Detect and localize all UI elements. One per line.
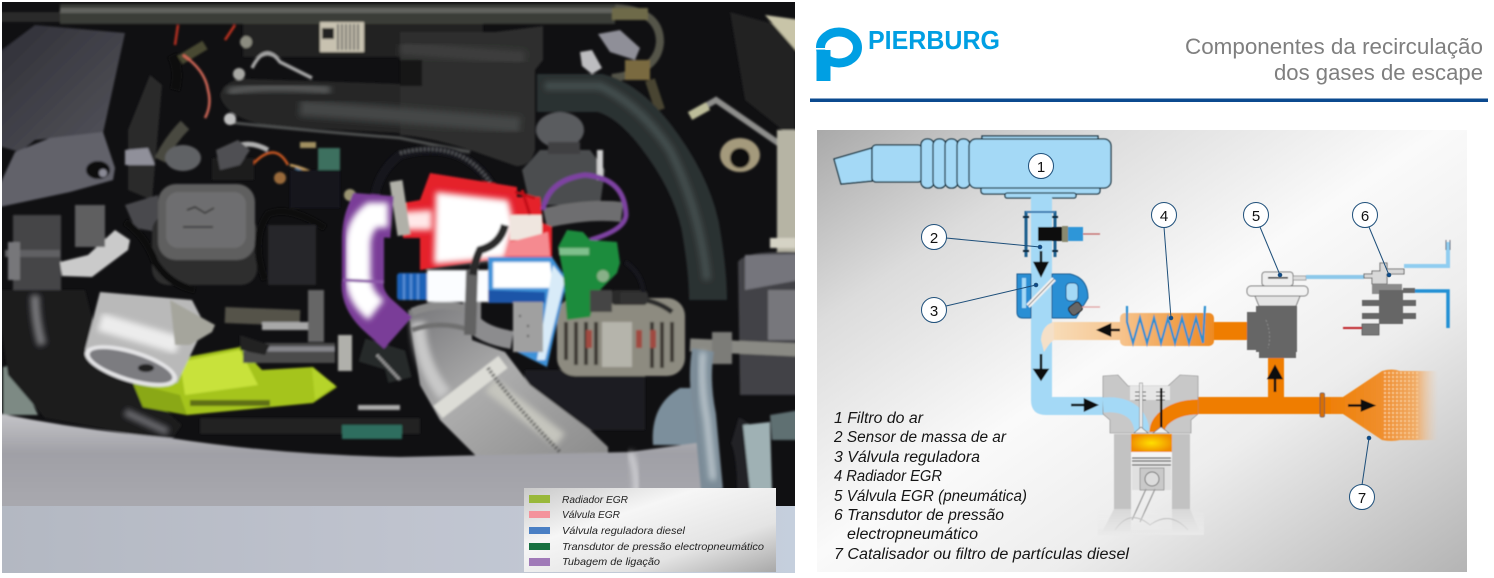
- logo: Pierburg: [814, 25, 1000, 81]
- callout 4: 4: [1160, 208, 1168, 225]
- thin purple tube loop: [543, 175, 626, 240]
- component list: 4 Radiador EGR: [834, 468, 942, 485]
- legend item: Válvula reguladora diesel: Válvula reguladora diesel: [562, 525, 686, 537]
- pipe blend: [1041, 322, 1054, 352]
- component list: electropneumático: [847, 526, 978, 543]
- callout 5: 5: [1252, 208, 1260, 225]
- oil filler cap: [152, 184, 257, 285]
- legend item: Tubagem de ligação: Tubagem de ligação: [562, 556, 660, 568]
- fender fold highlight: [630, 452, 636, 506]
- legend item: Transdutor de pressão electropneumático: Transdutor de pressão electropneumático: [562, 541, 764, 553]
- bolts and small bright pipe: [224, 36, 312, 150]
- dark box under loom: [268, 225, 316, 285]
- regulating valve in blue: [397, 257, 567, 367]
- callout 7: 7: [1358, 490, 1366, 507]
- silver filter canister: [80, 292, 215, 395]
- EGR valve: [1247, 272, 1308, 358]
- air intake pipe: [1031, 197, 1104, 415]
- component list: 6 Transdutor de pressão: [834, 507, 1004, 524]
- legend item: Válvula EGR: Válvula EGR: [562, 509, 620, 521]
- engine cylinder cross-section: [1098, 375, 1204, 535]
- grey clamp on red valve: [396, 181, 404, 235]
- photo colour: green EGR radiator: [133, 347, 337, 415]
- photo bottom strip: [2, 506, 795, 573]
- component list: 1 Filtro do ar: [834, 410, 924, 427]
- callout 6: [1352, 202, 1391, 277]
- pneumatic line 5 to 6: [1306, 275, 1364, 279]
- dark belts behind the pipe: [525, 370, 645, 430]
- hose sheen: [545, 86, 707, 280]
- top pipe arch and pale fittings: [580, 8, 660, 110]
- callout 3: [922, 283, 1038, 322]
- air mass sensor: [1023, 211, 1100, 257]
- grey bracket and pipe beside valve: [470, 270, 512, 340]
- large silver intake pipe: [408, 305, 608, 460]
- flow arrow up: [1269, 367, 1281, 392]
- blue-grey hose over fender: [701, 350, 713, 490]
- photo: engine bay with coloured EGR components: [0, 2, 800, 573]
- flow arrow right: [1071, 400, 1096, 410]
- hose clamp: [5, 242, 60, 280]
- callout 3: 3: [930, 303, 938, 320]
- photo legend: [524, 488, 776, 572]
- left black hose: [0, 290, 182, 442]
- corrugated loom across valve: [473, 225, 505, 275]
- throttle valve: [1017, 274, 1100, 318]
- pressure transducer in green: [558, 230, 648, 320]
- legend item: Radiador EGR: [529, 494, 628, 506]
- left engine cover: [0, 25, 162, 232]
- component list: 3 Válvula reguladora: [834, 449, 980, 466]
- air filter: [834, 136, 1111, 198]
- pale strip behind hose: [3, 365, 38, 415]
- component list: 2 Sensor de massa de ar: [833, 429, 1007, 446]
- barcode label: [320, 22, 364, 52]
- component list: 5 Válvula EGR (pneumática): [834, 488, 1027, 505]
- callout 2: [922, 224, 1042, 250]
- flow arrow down: [1035, 354, 1047, 379]
- top cross pipe: [0, 4, 615, 57]
- alternator: [557, 290, 685, 376]
- black wiring loom: [125, 149, 505, 290]
- callout 1: 1: [1037, 159, 1045, 176]
- oil filter housing: [522, 112, 622, 218]
- pressure transducer: [1343, 240, 1450, 335]
- callout 4: [1152, 202, 1176, 320]
- panel: EGR system diagram: [817, 130, 1467, 572]
- title: dos gases de escape: [1274, 60, 1483, 85]
- header rule: [810, 98, 1488, 102]
- logo: Pierburg: PIERBURG: [868, 25, 1000, 55]
- wiring and connectors: [154, 23, 311, 172]
- component list: 7 Catalisador ou filtro de partículas diesel: [834, 546, 1130, 563]
- intake manifold and cover: [220, 26, 543, 166]
- flow arrow left: [1099, 325, 1124, 335]
- legend item: Válvula EGR: [529, 509, 620, 521]
- belt and pulley: [200, 405, 420, 439]
- callout 5: [1244, 202, 1282, 277]
- exhaust riser: [1268, 358, 1284, 400]
- bluish hose to bottom right: [653, 388, 800, 510]
- EGR valve in red: [400, 173, 552, 270]
- callout 7: [1350, 436, 1374, 510]
- hoses and clamps right of canister: [225, 290, 400, 380]
- hot exhaust branch: [1214, 322, 1249, 340]
- flow arrow down: [1035, 251, 1047, 275]
- right upper area: [690, 12, 800, 395]
- legend item: Radiador EGR: Radiador EGR: [562, 494, 628, 506]
- hose highlights: [35, 295, 168, 432]
- left bracket: [13, 205, 130, 290]
- component list: [833, 410, 1130, 563]
- right black radiator hose: [537, 93, 708, 300]
- grey front fender: [0, 412, 704, 515]
- sensor cluster: [165, 140, 356, 208]
- catalyst / particle filter: [1320, 370, 1438, 441]
- title: [1185, 34, 1483, 85]
- EGR return pipe (cooled): [1052, 322, 1122, 340]
- callout 1: [1028, 154, 1054, 178]
- callout 2: 2: [930, 230, 938, 247]
- callout 6: 6: [1361, 208, 1369, 225]
- small pipe at right: [690, 332, 800, 364]
- title: Componentes da recirculação: [1185, 34, 1483, 59]
- exhaust pipe: [1190, 397, 1322, 414]
- purple connecting pipe: [343, 215, 398, 333]
- EGR cooler: [1120, 306, 1214, 346]
